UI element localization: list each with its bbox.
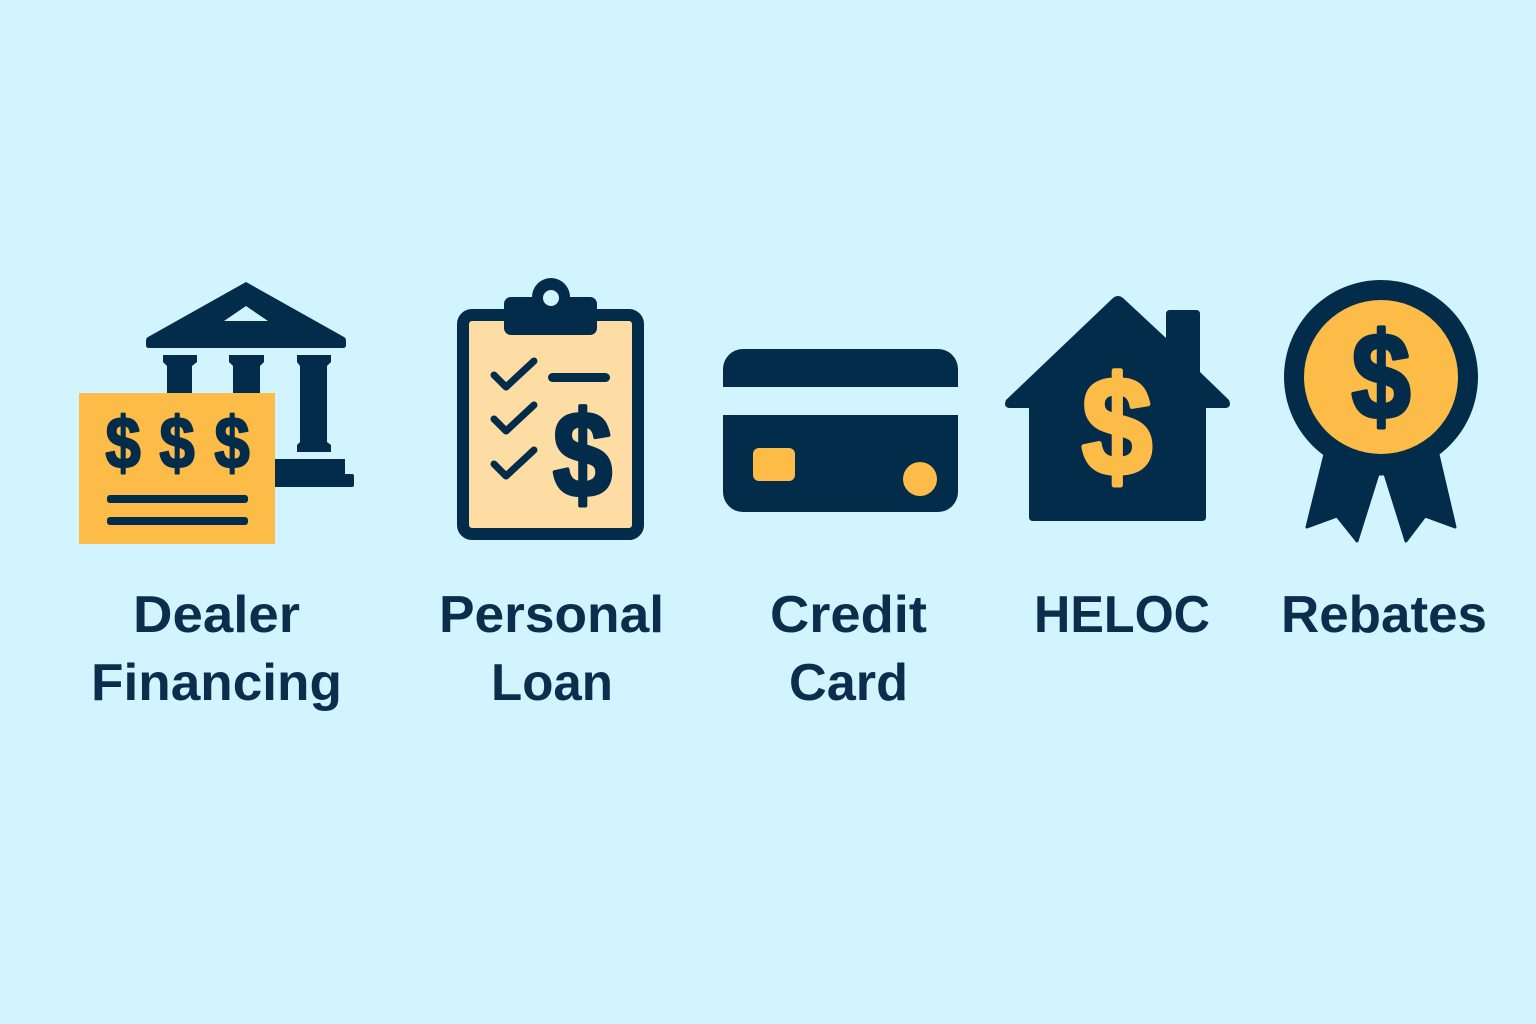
label: Dealer Financing: Financing	[91, 654, 342, 712]
panel: dealer financing	[79, 282, 354, 712]
label: HELOC: HELOC	[1034, 586, 1210, 644]
icon: bank building	[146, 282, 354, 487]
icon: yellow loan document: $	[105, 403, 141, 484]
icon: house with dollar: $	[1082, 348, 1152, 505]
icon: clipboard: $	[553, 387, 612, 523]
icon: credit card	[723, 349, 958, 512]
label: Credit Card: Card	[789, 654, 908, 712]
icon: yellow loan document: $	[159, 403, 195, 484]
label: Personal Loan: Personal	[439, 586, 664, 644]
icon: yellow loan document	[79, 393, 275, 544]
panel: credit card	[723, 349, 958, 712]
icon: yellow loan document: $	[214, 403, 250, 484]
icon: ribbon badge	[1284, 280, 1478, 541]
icon: ribbon badge: $	[1352, 308, 1410, 445]
icon: clipboard	[463, 278, 638, 534]
panel: HELOC	[1005, 296, 1230, 644]
label: Credit Card: Credit	[770, 586, 927, 644]
icon: house with dollar	[1005, 296, 1230, 521]
label: Rebates: Rebates	[1281, 586, 1487, 644]
panel: personal loan	[439, 278, 664, 712]
label: Dealer Financing: Dealer	[133, 586, 300, 644]
panel: rebates	[1281, 280, 1487, 644]
label: Personal Loan: Loan	[491, 654, 613, 712]
